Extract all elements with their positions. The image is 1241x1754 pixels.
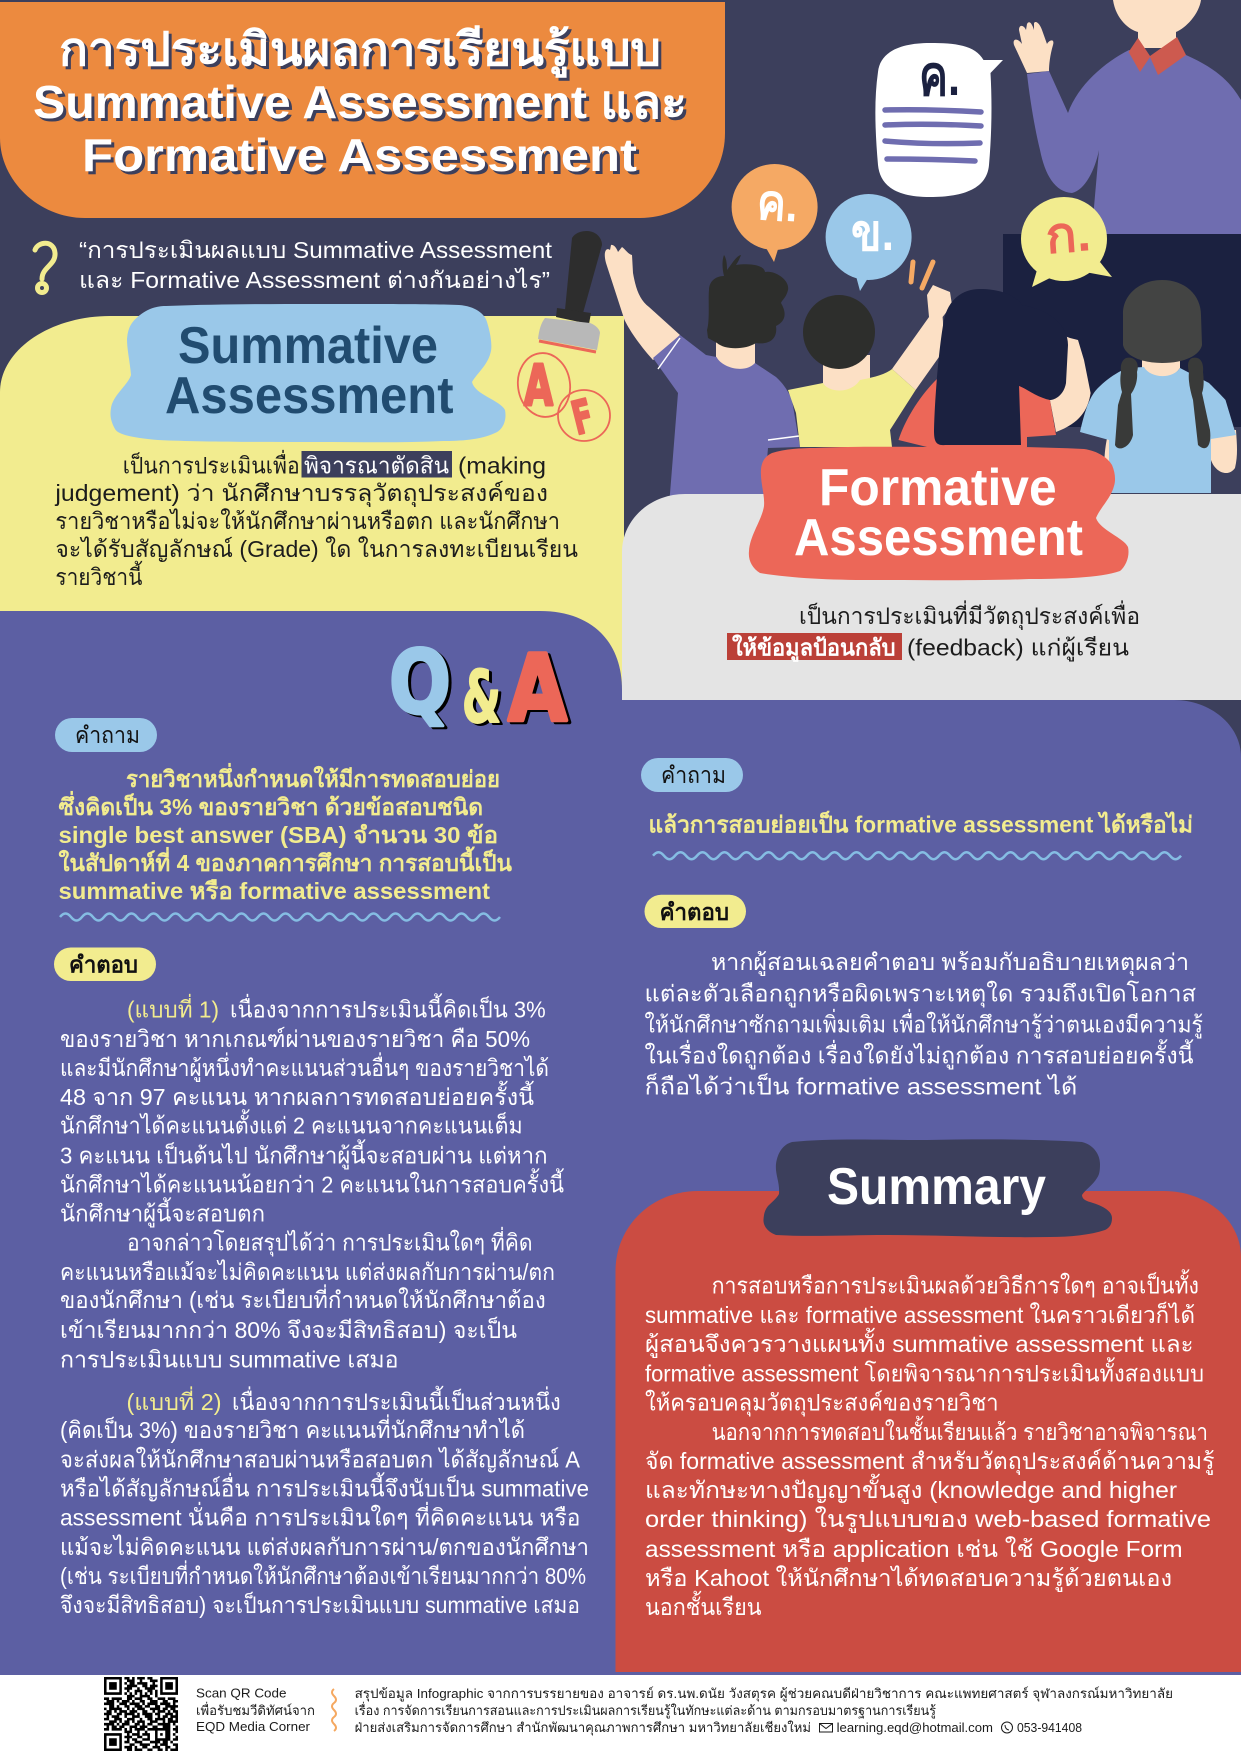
footer: credits [355,1686,1173,1736]
summative description: จะได้รับสัญลักษณ์ (Grade) ใด ในการลงทะเบียนเรียน [55,536,578,562]
summary text: หรือ Kahoot ให้นักศึกษาได้ทดสอบความรู้ด้วยตนเอง [645,1565,1172,1592]
answer text: ให้นักศึกษาซักถามเพิ่มเติม เพื่อให้นักศึกษารู้ว่าตนเองมีความรู้ [644,1009,1203,1039]
answer text: แต่ละตัวเลือกถูกหรือผิดเพราะเหตุใด รวมถึงเปิดโอกาส [644,981,1196,1008]
icon: grades A and F [514,350,610,446]
answer text: option 1 [60,994,564,1373]
summative description: รายวิชานี้ [55,561,143,590]
title text: Summative Assessment และ [33,76,687,128]
answer text: option 2: แม้จะไม่คิดคะแนน แต่ส่งผลกับการผ่าน/ตกของนักศึกษา [60,1534,589,1560]
question text: single best answer (SBA) จำนวน 30 ข้อ [58,822,498,848]
illustration: teacher and students [605,0,1241,500]
footer: scan caption [196,1686,315,1734]
answer text: option 2: จึงจะมีสิทธิสอบ) จะเป็นการประเมินแบบ summative เสมอ [60,1590,580,1618]
summative description: พิจารณาตัดสิน [304,452,449,478]
panel: formative assessment [622,447,1241,700]
student: blue shirt with braids [1080,280,1237,493]
answer text: option 1: นักศึกษาได้คะแนนน้อยกว่า 2 คะแนนในการสอบครั้งนี้ [60,1169,564,1198]
title text [33,23,687,181]
heading blob: Summative Assessment [110,304,506,442]
question text: แล้วการสอบย่อยเป็น formative assessment ได้หรือไม่ [648,810,1193,838]
icon: envelope [820,1724,832,1732]
label pill: answer: คำตอบ [660,899,729,925]
panel: title [0,2,725,218]
answer text: option 2: หรือได้สัญลักษณ์อื่น การประเมินนี้จึงนับเป็น summative [60,1473,589,1502]
answer text: option 1: คะแนนหรือแม้จะไม่คิดคะแนน แต่ส่งผลกับการผ่าน/ตก [60,1259,555,1285]
summary text: นอกชั้นเรียน [645,1591,762,1620]
student: coral shirt [898,289,1091,447]
answer text: option 1: (แบบที่ 1) [127,994,219,1022]
summative description: เป็นการประเมินเพื่อ [123,450,300,478]
question text: “การประเมินผลแบบ Summative Assessment [79,237,553,263]
answer text: หากผู้สอนเฉลยคำตอบ พร้อมกับอธิบายเหตุผลว่า [711,949,1189,976]
question text: ในสัปดาห์ที่ 4 ของภาคการศึกษา การสอบนี้เป็น [58,846,512,876]
icon: phone [1002,1722,1012,1733]
Q and A logo: & [462,655,501,739]
footer: credits: learning.eqd@hotmail.com [837,1720,993,1735]
summary text: assessment หรือ application เช่น ใช้ Google Form [645,1536,1183,1562]
answer text [644,949,1203,1099]
yellow speech bubble: ก. [1044,205,1092,264]
answer text: option 1: เข้าเรียนมากกว่า 80% จึงจะมีสิทธิสอบ) จะเป็น [60,1315,517,1343]
heading blob: Formative Assessment [749,447,1129,580]
white speech bubble: ค. [919,44,960,107]
answer text: option 1: อาจกล่าวโดยสรุปได้ว่า การประเมินใดๆ ที่คิด [127,1227,533,1257]
student: purple shirt [605,245,800,500]
orange speech bubble: ค. [755,174,800,233]
yellow speech bubble [1021,197,1112,287]
question text: ซึ่งคิดเป็น 3% ของรายวิชา ด้วยข้อสอบชนิด [58,790,483,820]
label pill: question: คำถาม [661,762,726,788]
footer: scan caption: Scan QR Code [196,1686,286,1701]
answer text: option 1: ของรายวิชา หากเกณฑ์ผ่านของรายวิชา คือ 50% [60,1026,530,1052]
title text: Formative Assessment [82,129,637,181]
answer text: option 2: (แบบที่ 2) [126,1386,222,1415]
summative description: judgement) ว่า นักศึกษาบรรลุวัตถุประสงค์ของ [54,480,548,507]
formative description: (feedback) แก่ผู้เรียน [907,635,1129,662]
answer text: option 2: (เช่น ระเบียบที่กำหนดให้นักศึกษาต้องเข้าเรียนมากกว่า 80% [60,1560,586,1589]
footer: credits: สรุปข้อมูล Infographic จากการบรรยายของ อาจารย์ ดร.นพ.ดนัย วังสตุรค ผู้ช่วยคณบดีฝ่ายวิชาการ คณะแพทยศาสตร์ จุฬาลงกรณ์มหาวิทยาลัย [355,1686,1173,1702]
blue speech bubble: ข. [851,205,894,261]
footer: scan caption: EQD Media Corner [196,1719,311,1734]
footer: credits: เรื่อง การจัดการเรียนการสอนและการประเมินผลการเรียนรู้ในทักษะแต่ละด้าน ตามกรอบมาตรฐานการเรียนรู้ [355,1702,936,1719]
answer text: option 1: ของนักศึกษา (เช่น ระเบียบที่กำหนดให้นักศึกษาต้อง [60,1284,546,1313]
answer text: option 2: (คิดเป็น 3%) ของรายวิชา คะแนนที่นักศึกษาทำได้ [60,1414,525,1443]
question text [79,237,553,293]
answer text: option 1: นักศึกษาผู้นี้จะสอบตก [60,1198,265,1228]
heading blob: Formative Assessment: Assessment [794,509,1083,567]
answer text: option 2: จะส่งผลให้นักศึกษาสอบผ่านหรือสอบตก ได้สัญลักษณ์ A [60,1447,581,1473]
footer: QR code [104,1678,178,1750]
formative description [732,600,1140,663]
footer: scan caption: เพื่อรับชมวีดิทัศน์จาก [196,1702,315,1718]
question text [58,762,512,904]
panel: summary [616,1139,1241,1672]
icon: grades A and F: F [566,388,599,446]
answer text: option 2: assessment นั่นคือ การประเมินใดๆ ที่คิดคะแนน หรือ [60,1502,580,1531]
orange tick marks [911,262,933,288]
footer background [0,1675,1241,1754]
summary text: summative และ formative assessment ในคราวเดียวก็ได้ [645,1300,1195,1328]
answer text: option 1: เนื่องจากการประเมินนี้คิดเป็น 3% [230,994,546,1022]
summary text: ผู้สอนจึงควรวางแผนทั้ง summative assessment และ [645,1328,1194,1358]
summative description [54,450,578,590]
summary text: ให้ครอบคลุมวัตถุประสงค์ของรายวิชา [645,1390,999,1417]
heading blob: Summary [763,1139,1112,1237]
panel: Q and A left [0,611,622,1675]
question text: และ Formative Assessment ต่างกันอย่างไร” [79,267,550,293]
icon: stamp [538,231,602,352]
answer text: option 1: การประเมินแบบ summative เสมอ [60,1347,399,1373]
footer: credits: ฝ่ายส่งเสริมการจัดการศึกษา สำนักพัฒนาคุณภาพการศึกษา มหาวิทยาลัยเชียงใหม่ [355,1720,811,1736]
answer text: option 1: 3 คะแนน เป็นต้นไป นักศึกษาผู้นี้จะสอบผ่าน แต่หาก [60,1140,548,1170]
question text: รายวิชาหนึ่งกำหนดให้มีการทดสอบย่อย [126,762,500,792]
label pill: question [55,718,157,752]
Q and A logo: Q [389,631,451,734]
label pill: answer [54,948,156,981]
white speech bubble [875,43,1003,197]
answer text: option 2: เนื่องจากการประเมินนี้เป็นส่วนหนึ่ง [232,1386,561,1415]
answer text: ก็ถือได้ว่าเป็น formative assessment ได้ [644,1071,1077,1099]
formative description: ให้ข้อมูลป้อนกลับ [732,634,896,663]
footer: credits: 053-941408 [1017,1720,1082,1735]
question text: summative หรือ formative assessment [58,878,490,904]
summative description: (making [458,452,546,478]
heading blob: Summative Assessment: Summative [178,317,438,375]
orange speech bubble [732,164,818,262]
highlight: judgement term [302,451,452,478]
summary text: order thinking) ในรูปแบบของ web-based formative [645,1506,1211,1533]
highlight: feedback term [727,633,902,660]
answer text: option 1: และมีนักศึกษาผู้หนึ่งทำคะแนนส่วนอื่นๆ ของรายวิชาได้ [60,1052,549,1082]
heading blob: Formative Assessment: Formative [819,459,1057,517]
label pill: question [641,758,743,792]
panel: Q and A right [622,700,1241,1675]
summary text: การสอบหรือการประเมินผลด้วยวิธีการใดๆ อาจเป็นทั้ง [712,1270,1199,1299]
summative description: รายวิชาหรือไม่จะให้นักศึกษาผ่านหรือตก และนักศึกษา [55,508,560,534]
answer text: option 2 [60,1386,589,1618]
answer text: option 1: 48 จาก 97 คะแนน หากผลการทดสอบย่อยครั้งนี้ [60,1081,534,1110]
formative description: เป็นการประเมินที่มีวัตถุประสงค์เพื่อ [799,600,1140,630]
Q and A logo: A [508,635,567,742]
panel: summative assessment [0,231,624,720]
answer text: ในเรื่องใดถูกต้อง เรื่องใดยังไม่ถูกต้อง การสอบย่อยครั้งนี้ [644,1039,1194,1069]
label pill: answer: คำตอบ [69,952,138,978]
label pill: answer [644,895,746,928]
Q and A logo [389,631,567,742]
summary text: และทักษะทางปัญญาขั้นสูง (knowledge and higher [645,1474,1177,1504]
summary text [645,1270,1214,1620]
heading blob: Summative Assessment: Assessment [165,367,454,425]
label pill: question: คำถาม [75,722,140,748]
blue speech bubble [826,194,912,291]
heading blob: Summary: Summary [827,1158,1046,1216]
dark navy backdrop [1003,234,1241,427]
summary text: จัด formative assessment สำหรับวัตถุประสงค์ด้านความรู้ [645,1448,1214,1475]
icon: question mark [35,243,55,292]
icon: grades A and F: A [524,354,553,419]
answer text: option 1: นักศึกษาได้คะแนนตั้งแต่ 2 คะแนนจากคะแนนเต็ม [60,1110,523,1139]
summary text: formative assessment โดยพิจารณาการประเมินทั้งสองแบบ [645,1357,1204,1386]
teacher [1014,0,1241,234]
title text: การประเมินผลการเรียนรู้แบบ [59,23,661,78]
student: yellow shirt [788,285,952,447]
